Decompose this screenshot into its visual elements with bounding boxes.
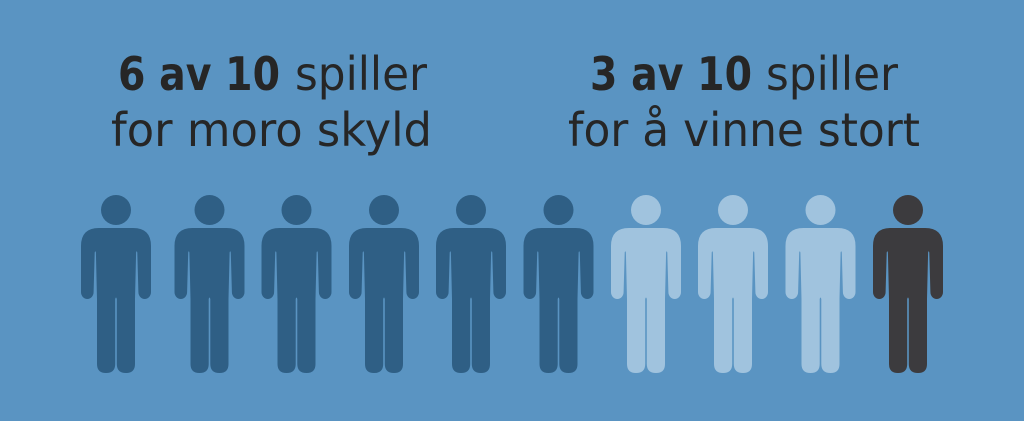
heading: 6 av 10 spiller for moro skyld (111, 47, 432, 157)
icon: person 7, light blue (611, 195, 681, 373)
icon: person 2, dark blue (174, 195, 244, 373)
icon: person 9, light blue (786, 195, 856, 373)
icon: person 4, dark blue (349, 195, 419, 373)
icon: person 5, dark blue (436, 195, 506, 373)
icon: person 8, light blue (698, 195, 768, 373)
heading: 6 av 10 spiller for moro skyld: for moro skyld (111, 103, 432, 157)
icon: person 1, dark blue (81, 195, 151, 373)
heading: 3 av 10 spiller for å vinne stort: 3 av 10 (590, 47, 752, 101)
icon: person 10, charcoal (873, 195, 943, 373)
icon: person 6, dark blue (524, 195, 594, 373)
heading: 3 av 10 spiller for å vinne stort: spiller (766, 47, 898, 101)
icon: person 3, dark blue (262, 195, 332, 373)
pictogram row: ten people (81, 195, 943, 373)
heading: 3 av 10 spiller for å vinne stort (568, 47, 920, 157)
heading: 3 av 10 spiller for å vinne stort: for å vinne stort (568, 103, 920, 157)
heading: 6 av 10 spiller for moro skyld: 6 av 10 (118, 47, 280, 101)
heading: 6 av 10 spiller for moro skyld: spiller (295, 47, 427, 101)
